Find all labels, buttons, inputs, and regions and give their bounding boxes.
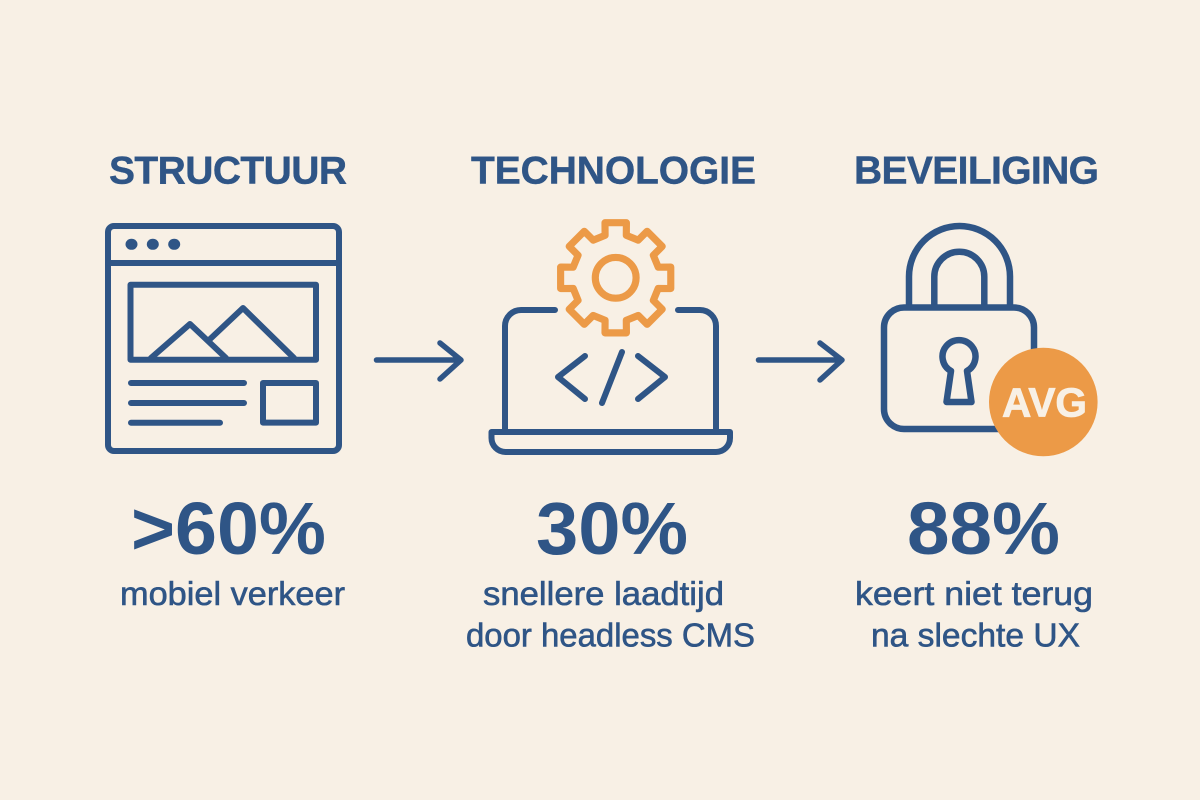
heading: beveiliging: BEVEILIGING (854, 150, 1099, 192)
icon: laptop with code (492, 310, 730, 452)
heading: technologie: TECHNOLOGIE (471, 150, 756, 192)
label: snellere laadtijd door headless CMS: snellere laadtijd (483, 575, 724, 612)
label: snellere laadtijd door headless CMS: door headless CMS (466, 616, 755, 654)
icon: browser window (108, 226, 339, 451)
arrow: technologie to beveiliging (758, 343, 842, 380)
label: snellere laadtijd door headless CMS (466, 575, 755, 654)
column: technologie (466, 150, 756, 654)
badge: AVG (989, 348, 1098, 456)
label: keert niet terug na slechte UX (855, 575, 1093, 654)
stat: 30%: 30% (536, 487, 688, 570)
icon: padlock (884, 226, 1034, 429)
heading: structuur: STRUCTUUR (109, 150, 347, 192)
badge: AVG: AVG (1002, 380, 1087, 426)
arrow: structuur to technologie (376, 343, 461, 379)
column: beveiliging (854, 150, 1099, 654)
label: mobiel verkeer: mobiel verkeer (120, 575, 345, 612)
label: keert niet terug na slechte UX: keert niet terug (855, 575, 1093, 612)
stat: 88%: 88% (907, 487, 1060, 570)
column: structuur (108, 150, 347, 612)
icon: gear (561, 223, 671, 333)
stat: >60%: >60% (131, 487, 326, 570)
label: keert niet terug na slechte UX: na slechte UX (871, 616, 1080, 654)
